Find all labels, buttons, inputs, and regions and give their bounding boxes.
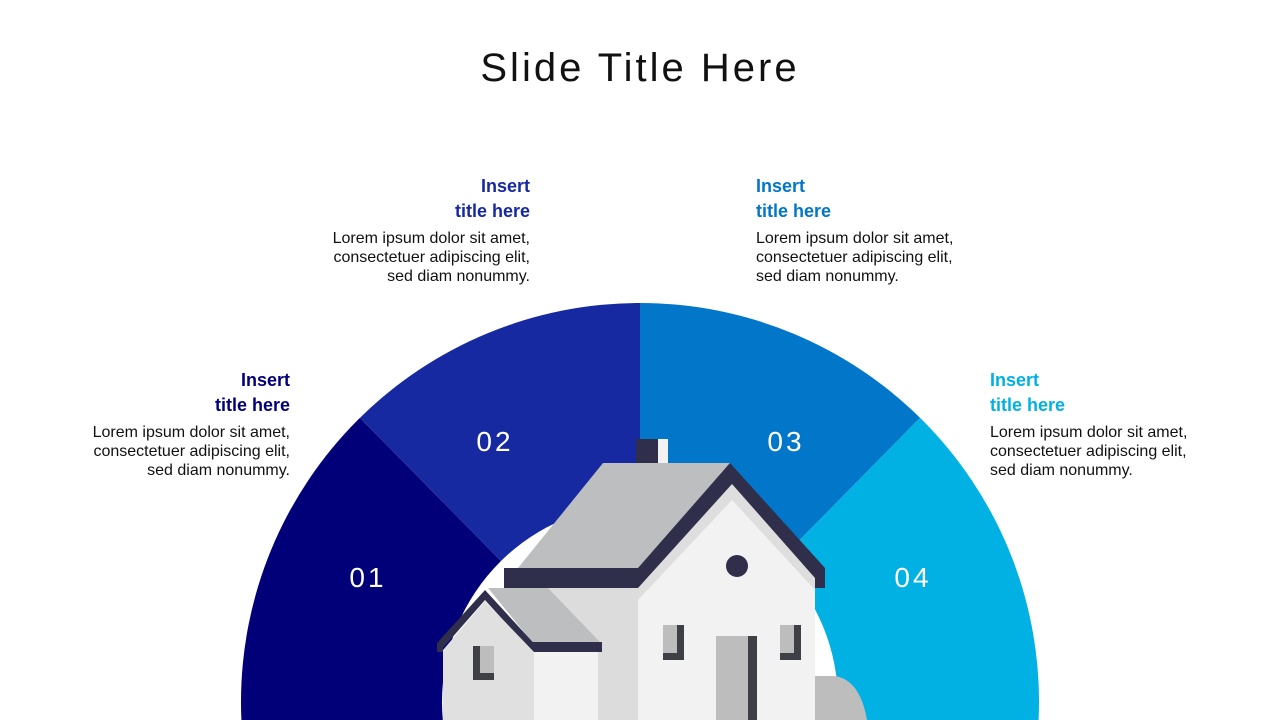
text block 04: Insert xyxy=(990,370,1039,390)
text block 02: sed diam nonummy. xyxy=(387,268,530,285)
title: Slide Title Here xyxy=(480,46,800,90)
number labels: 03 xyxy=(767,426,805,457)
text block 02: consectetuer adipiscing elit, xyxy=(333,249,530,266)
text block 03: title here xyxy=(756,201,831,221)
text block 02 xyxy=(333,176,530,285)
text block 03 xyxy=(756,176,953,285)
text block 04: sed diam nonummy. xyxy=(990,462,1133,479)
text block 02: title here xyxy=(455,201,530,221)
text block 01: Insert xyxy=(241,370,290,390)
number labels: 02 xyxy=(476,426,514,457)
segment 02 xyxy=(360,303,640,561)
text block 03: consectetuer adipiscing elit, xyxy=(756,249,953,266)
segment 04 xyxy=(800,418,1039,720)
number labels: 04 xyxy=(894,562,932,593)
segment 01 xyxy=(241,303,1039,720)
text block 01: Lorem ipsum dolor sit amet, xyxy=(93,424,290,441)
text block 01 xyxy=(93,370,290,479)
chart: semicircle with house xyxy=(241,303,1039,720)
segment 03 xyxy=(640,303,920,540)
text block 01: consectetuer adipiscing elit, xyxy=(93,443,290,460)
text block 04: Lorem ipsum dolor sit amet, xyxy=(990,424,1187,441)
icon: house xyxy=(437,439,867,720)
text block 03: Insert xyxy=(756,176,805,196)
text block 02: Lorem ipsum dolor sit amet, xyxy=(333,230,530,247)
text block 01: sed diam nonummy. xyxy=(147,462,290,479)
text block 04 xyxy=(990,370,1187,479)
number labels xyxy=(349,426,932,593)
number labels: 01 xyxy=(349,562,387,593)
text block 02: Insert xyxy=(481,176,530,196)
text block 03: Lorem ipsum dolor sit amet, xyxy=(756,230,953,247)
text block 01: title here xyxy=(215,395,290,415)
text block 04: title here xyxy=(990,395,1065,415)
text block 03: sed diam nonummy. xyxy=(756,268,899,285)
text block 04: consectetuer adipiscing elit, xyxy=(990,443,1187,460)
